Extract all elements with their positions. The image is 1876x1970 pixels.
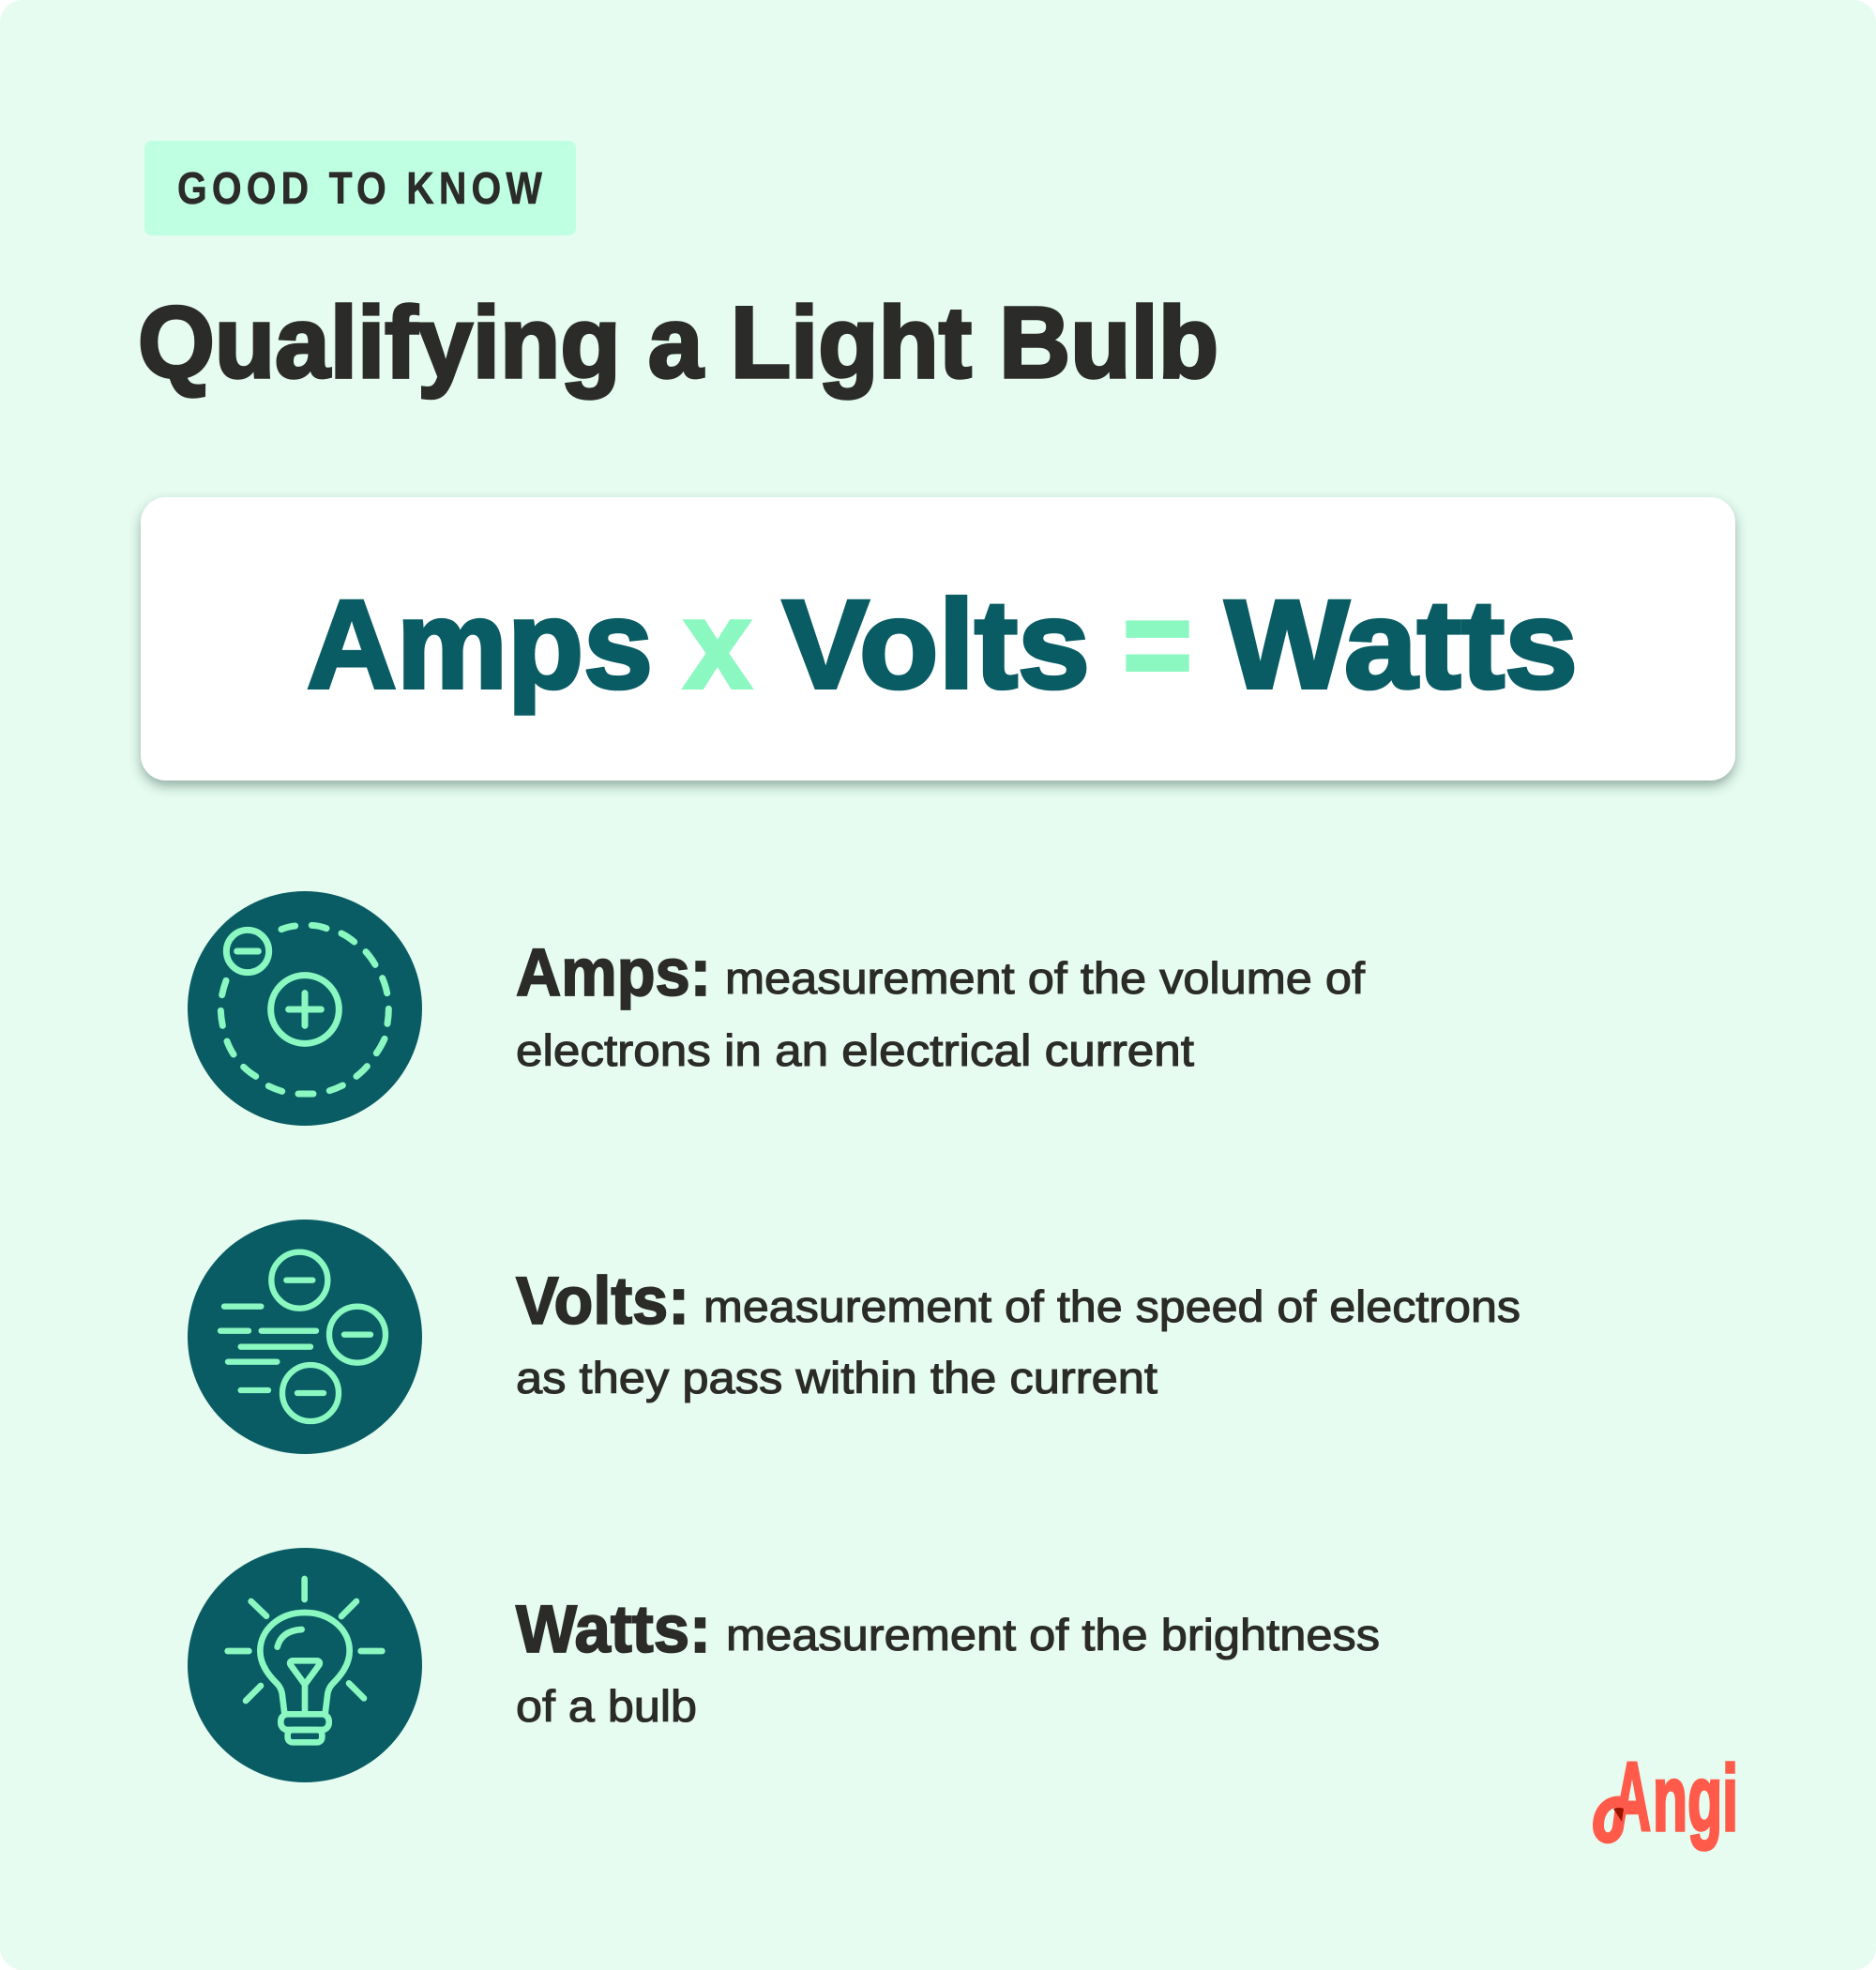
text: watts definition: of a bulb <box>516 1681 697 1731</box>
text: amps definition: measurement of the volume of <box>725 953 1366 1003</box>
text: watts definition <box>516 1593 1380 1731</box>
logo: Angi: A <box>1613 1743 1651 1852</box>
title: Qualifying a Light Bulb <box>138 285 1218 399</box>
text: amps definition: electrons in an electrical current <box>516 1025 1194 1075</box>
logo: Angi <box>1598 1743 1738 1852</box>
panel: formula card <box>141 497 1735 780</box>
icon: amps atom <box>188 891 422 1126</box>
icon: volts moving electrons <box>188 1220 422 1454</box>
text: amps definition <box>516 936 1366 1075</box>
formula: volts: Volts <box>782 575 1090 715</box>
formula: amps: Amps <box>307 575 653 715</box>
tag: good to know <box>144 141 576 235</box>
text: watts definition: measurement of the brightness <box>726 1610 1380 1659</box>
text: volts definition: measurement of the speed of electrons <box>704 1281 1520 1331</box>
tag: good to know: GOOD TO KNOW <box>177 164 547 214</box>
text: volts definition: Volts: <box>516 1265 689 1339</box>
text: volts definition: as they pass within the current <box>516 1353 1157 1402</box>
logo: Angi: ngi <box>1653 1746 1738 1850</box>
icon: watts light bulb <box>188 1548 422 1782</box>
text: watts definition: Watts: <box>516 1593 711 1667</box>
formula: equals sign: = <box>1123 575 1192 715</box>
text: volts definition <box>516 1265 1520 1402</box>
formula: watts: Watts <box>1225 575 1578 715</box>
text: amps definition: Amps: <box>516 936 711 1010</box>
formula: times sign: x <box>684 575 751 715</box>
